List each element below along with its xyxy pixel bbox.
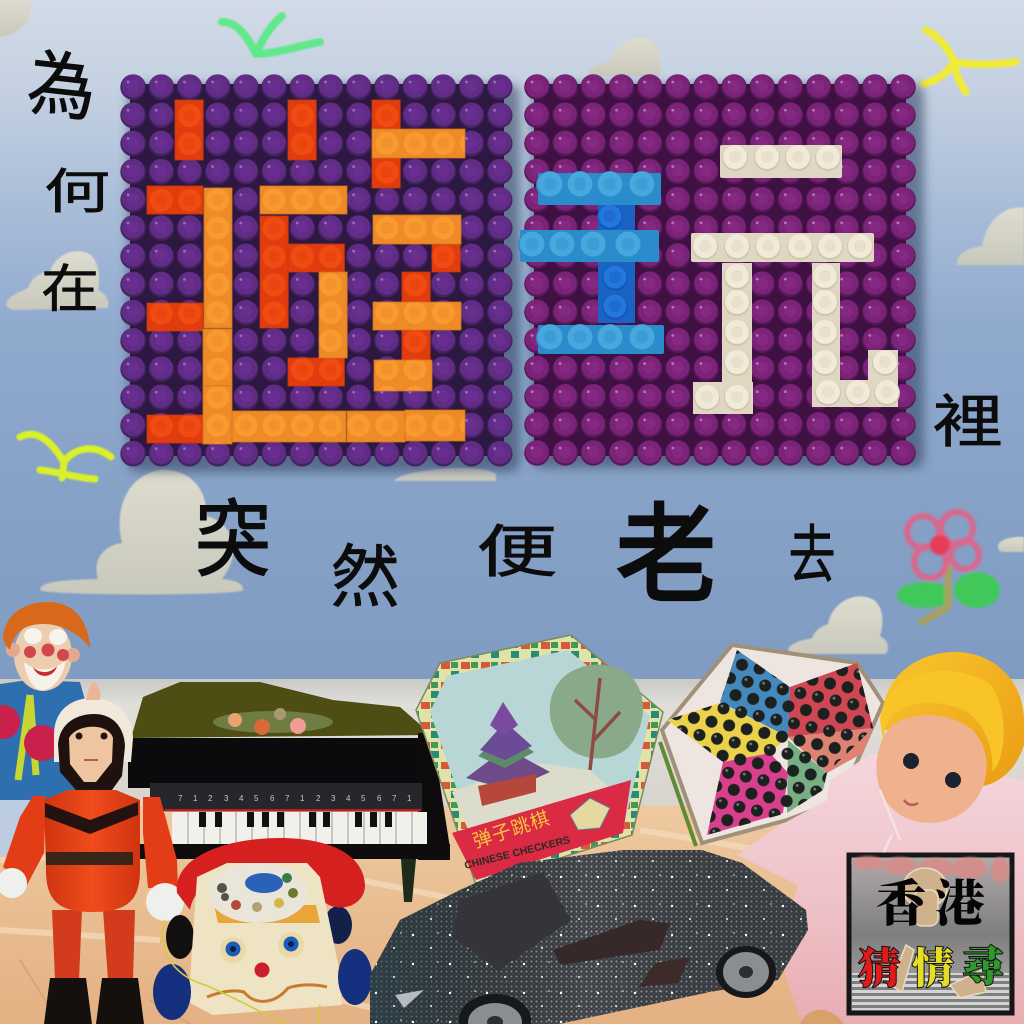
lanterns <box>852 856 1009 883</box>
red balls <box>0 705 60 761</box>
game: star checkers board <box>660 645 883 846</box>
rear wheel <box>459 994 531 1024</box>
red arm <box>788 663 873 737</box>
board: 玩 brick character <box>518 73 924 468</box>
clown smile <box>33 666 57 676</box>
brush bird: yellow-green lower left <box>20 434 111 479</box>
board base <box>534 84 906 456</box>
clown hat <box>3 602 90 650</box>
side intake <box>639 957 690 987</box>
pink arm <box>707 753 788 835</box>
phone eyes <box>220 932 304 963</box>
box: Chinese checkers lid <box>416 635 663 885</box>
red banner <box>452 780 631 880</box>
clown mouth paint <box>24 660 66 690</box>
character: 為: 為 <box>24 43 100 130</box>
fists <box>0 868 184 921</box>
windshield <box>452 872 571 970</box>
lid picture <box>430 650 650 868</box>
marble holes <box>667 650 873 835</box>
board shadow <box>532 84 924 468</box>
cloud: lower right <box>788 596 888 654</box>
character: 何: 何 <box>44 166 110 219</box>
crayon flower <box>897 512 1000 622</box>
piano side <box>418 733 450 860</box>
orange bricks <box>203 129 465 444</box>
hand-shaped figure <box>890 868 986 998</box>
torso <box>44 790 140 912</box>
face <box>69 727 113 782</box>
left arm <box>3 796 46 885</box>
white bar top <box>720 145 842 178</box>
front wheels <box>153 949 372 1020</box>
white foot right <box>812 350 898 407</box>
yellow arm <box>667 703 788 762</box>
helmet <box>54 698 133 762</box>
banner english title: CHINESE CHECKERS <box>463 834 571 872</box>
toy: clown <box>0 602 90 856</box>
white foot left <box>693 382 753 414</box>
handwritten tagline <box>194 494 835 617</box>
character: 突: 突 <box>194 494 272 588</box>
keyboard base <box>135 844 450 859</box>
cloud: left middle <box>6 251 109 310</box>
doll mouth <box>904 800 918 805</box>
front wheel <box>716 946 776 998</box>
red handset <box>177 838 365 910</box>
logo word: 情: 情 <box>912 936 954 996</box>
hair fringe <box>880 671 1004 772</box>
toy: rhinestone sports car <box>370 850 808 1024</box>
hair back <box>882 652 1024 786</box>
board shadow <box>128 84 520 472</box>
eyes <box>76 732 108 740</box>
hair <box>58 714 125 790</box>
cloud: large lower left <box>40 470 243 594</box>
bird wings <box>924 30 1016 92</box>
piano leg <box>401 859 416 902</box>
purple studs <box>119 73 514 468</box>
yellow-red face panel <box>214 905 320 923</box>
flower centre <box>930 535 950 555</box>
car body <box>370 850 808 1024</box>
lid border <box>416 635 663 885</box>
character: 老: 老 <box>616 497 716 617</box>
bird wings <box>222 16 320 54</box>
banner star emblem <box>570 798 610 830</box>
white keys <box>172 812 427 844</box>
chest chevron <box>45 802 138 834</box>
black keys <box>199 812 392 827</box>
flower petals <box>907 512 979 578</box>
blue top bar <box>538 173 661 205</box>
banner chinese title: 弹子跳棋 <box>470 807 553 853</box>
piano lid <box>131 682 432 738</box>
temple of heaven <box>466 702 550 806</box>
rear wheels <box>166 906 352 959</box>
character: 然: 然 <box>330 539 400 616</box>
logo heading: 香港: 香港 <box>876 864 985 936</box>
green arm <box>787 740 827 813</box>
logo word: 猜: 猜 <box>858 936 900 996</box>
right arm <box>143 797 178 888</box>
brush bird: yellow top right <box>924 30 1016 92</box>
clown eyes <box>24 628 67 645</box>
white wide bar <box>691 233 874 262</box>
knitted dress <box>737 753 1024 1024</box>
blue bricks <box>518 171 664 354</box>
blue bottom bar <box>538 325 664 354</box>
clown body <box>0 680 85 804</box>
floral decoration <box>213 708 333 735</box>
note numbers: 7123456712345671 <box>178 794 412 803</box>
piano body <box>128 738 432 788</box>
doll eyes <box>903 753 961 788</box>
red felt line <box>165 809 421 812</box>
board: 遊 brick character <box>119 73 520 472</box>
character: 裡: 裡 <box>933 390 1003 454</box>
character: 在: 在 <box>41 260 99 318</box>
boots <box>44 978 144 1024</box>
cloud: right edge <box>957 207 1024 265</box>
doll leg <box>800 1010 844 1024</box>
green stand <box>660 742 696 846</box>
toy: piano <box>128 682 450 902</box>
blue middle bar <box>520 230 659 262</box>
rotary dial <box>208 863 308 923</box>
steps <box>852 973 1009 1010</box>
cloud: far right sliver <box>998 537 1024 552</box>
white bricks <box>691 145 900 414</box>
salmon arm <box>788 728 873 773</box>
car glints <box>370 850 808 1024</box>
bird wings <box>20 434 111 479</box>
clown ears <box>6 643 80 662</box>
red bricks <box>147 100 460 443</box>
yellow string <box>162 920 320 1024</box>
neck ribbon <box>880 790 900 860</box>
yellow ribbon <box>18 695 36 780</box>
cloud: top left corner <box>0 0 31 37</box>
left vertical text <box>24 43 110 318</box>
legs <box>52 910 135 980</box>
logo frame <box>849 855 1012 1013</box>
lips <box>84 759 98 761</box>
phone smile <box>207 985 327 1001</box>
white right column <box>812 263 840 381</box>
toy: chatter telephone <box>153 838 372 1024</box>
logo word: 尋: 尋 <box>962 934 1004 994</box>
dark blue stem <box>598 205 635 323</box>
clown face <box>14 619 72 691</box>
board base <box>130 84 504 456</box>
blue arm <box>720 650 790 737</box>
clown nose and cheeks <box>24 644 69 661</box>
flower stem <box>922 567 948 622</box>
cloud: small peek under left board <box>394 468 496 481</box>
phone body <box>190 863 342 1015</box>
belt <box>46 852 133 865</box>
toy: baby doll <box>737 652 1024 1024</box>
wooden floor <box>0 806 1024 1024</box>
headlight <box>395 990 424 1008</box>
white left column <box>722 263 752 383</box>
toy: red helmet figure <box>0 682 184 1024</box>
doll face <box>876 715 987 823</box>
phone nose <box>254 962 270 978</box>
clouds <box>0 0 1024 654</box>
character: 去: 去 <box>789 520 835 591</box>
helmet crest <box>86 682 101 700</box>
side window <box>553 920 670 965</box>
brush bird: green <box>222 16 320 54</box>
magenta studs <box>523 73 918 468</box>
note strip <box>150 783 422 811</box>
board frame <box>662 645 883 843</box>
character: 便: 便 <box>477 520 557 584</box>
car shading <box>370 850 808 1024</box>
logo: 香港猜情尋 <box>849 855 1012 1013</box>
checked trousers <box>0 800 32 856</box>
stairs and terrace <box>452 762 612 834</box>
cloud: behind right board <box>588 38 660 76</box>
wall skirting <box>0 679 1024 809</box>
flower leaves <box>897 572 1000 608</box>
tree <box>550 665 643 770</box>
